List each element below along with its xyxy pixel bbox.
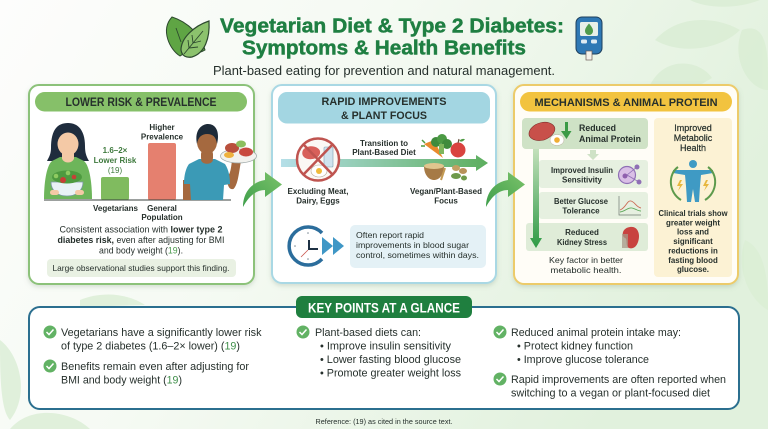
label: transition: Transition to bbox=[360, 139, 408, 148]
reference note: Reference: (19) as cited in the source text. bbox=[316, 419, 453, 426]
arrow: long down bbox=[530, 149, 542, 248]
column: lower risk points: of type 2 diabetes (1.6–2× lower) (19) bbox=[61, 340, 240, 352]
heading: rapid improvements: RAPID IMPROVEMENTS bbox=[322, 96, 446, 108]
column: animal protein points bbox=[494, 326, 726, 400]
chart labels: 1.6–2× bbox=[103, 146, 128, 155]
label: excluding meat: Dairy, Eggs bbox=[296, 196, 340, 206]
row: insulin sensitivity bbox=[539, 160, 648, 188]
icon: clock with arrow bbox=[289, 227, 344, 265]
callout: rapid improvements: Often report rapid bbox=[356, 230, 424, 240]
arrow: small down bbox=[587, 150, 599, 160]
chart baseline bbox=[44, 200, 231, 201]
illustration: woman with salad bbox=[44, 123, 92, 199]
box: improved metabolic health: fasting blood bbox=[668, 256, 718, 265]
column: plant based points: • Promote greater weight loss bbox=[320, 368, 461, 380]
label: vegan focus bbox=[410, 187, 482, 206]
heading: rapid improvements bbox=[278, 92, 490, 124]
box: improved metabolic health: greater weight bbox=[666, 218, 720, 228]
column: plant based points: • Improve insulin sensitivity bbox=[320, 340, 451, 352]
chart labels: Population bbox=[141, 213, 183, 222]
panel: rapid improvements bbox=[272, 85, 496, 283]
label: excluding meat bbox=[288, 187, 348, 206]
box: improved metabolic health: reductions in bbox=[668, 246, 718, 256]
text: consistent association: diabetes risk, even after adjusting for BMI bbox=[58, 235, 224, 246]
box: improved metabolic health bbox=[654, 118, 732, 277]
title bbox=[220, 14, 564, 60]
box: improved metabolic health: loss and bbox=[677, 228, 709, 236]
chart labels: Prevalence bbox=[141, 132, 184, 142]
column: animal protein points: switching to a vegan or plant-focused diet bbox=[511, 388, 711, 400]
chart labels bbox=[93, 123, 184, 222]
icon: check three bbox=[296, 326, 310, 338]
chart labels: Higher bbox=[149, 123, 175, 132]
column: animal protein points: • Protect kidney function bbox=[517, 340, 633, 352]
bar: general population bbox=[148, 143, 176, 200]
panel: lower risk and prevalence bbox=[29, 85, 256, 284]
row: kidney stress bbox=[526, 223, 648, 251]
heading: key points: KEY POINTS AT A GLANCE bbox=[308, 300, 460, 316]
panel: key points bbox=[29, 296, 739, 409]
column: plant based points: • Lower fasting blood glucose bbox=[320, 354, 461, 366]
column: animal protein points: • Improve glucose tolerance bbox=[517, 354, 649, 366]
heading: mechanisms bbox=[520, 92, 732, 112]
note: observational studies: Large observational studies support this finding. bbox=[52, 263, 230, 273]
column: lower risk points: BMI and body weight (19) bbox=[61, 374, 182, 386]
column: plant based points: Plant-based diets can: bbox=[315, 327, 421, 339]
row: glucose tolerance bbox=[539, 192, 648, 219]
heading: lower risk bbox=[35, 92, 247, 112]
row: insulin sensitivity: Improved Insulin bbox=[551, 166, 613, 175]
bar: vegetarians bbox=[101, 177, 129, 200]
chart labels: Lower Risk bbox=[94, 156, 137, 165]
icon: check four bbox=[494, 326, 506, 338]
icon: check five bbox=[494, 372, 506, 386]
box: improved metabolic health: Health bbox=[680, 143, 706, 153]
title: Vegetarian Diet & Type 2 Diabetes: bbox=[220, 14, 564, 38]
box: reduced animal protein: Animal Protein bbox=[579, 134, 641, 144]
arrow: panel one to two bbox=[243, 172, 282, 207]
box: reduced animal protein bbox=[522, 118, 648, 149]
text: key factor: Key factor in better bbox=[549, 255, 623, 265]
text: consistent association: and body weight (19). bbox=[99, 246, 183, 256]
chart labels: Vegetarians bbox=[93, 204, 139, 213]
column: lower risk points: Vegetarians have a significantly lower risk bbox=[61, 327, 262, 339]
chart labels: (19) bbox=[108, 166, 122, 175]
column: animal protein points: Reduced animal protein intake may: bbox=[511, 327, 681, 339]
icon: leaves bbox=[167, 17, 209, 57]
label: vegan focus: Vegan/Plant-Based bbox=[410, 187, 482, 196]
heading: rapid improvements: & PLANT FOCUS bbox=[341, 110, 427, 122]
box: improved metabolic health: significant bbox=[673, 237, 713, 246]
icon: glucose meter bbox=[576, 17, 602, 60]
callout: rapid improvements: control, sometimes within days. bbox=[356, 250, 479, 260]
panel: mechanisms and animal protein bbox=[514, 85, 738, 284]
heading: mechanisms: MECHANISMS & ANIMAL PROTEIN bbox=[534, 97, 718, 109]
box: improved metabolic health: glucose. bbox=[677, 265, 709, 274]
icon: check two bbox=[44, 360, 56, 372]
chart labels: General bbox=[147, 204, 177, 213]
subtitle: Plant-based eating for prevention and natural management. bbox=[213, 63, 555, 78]
box: reduced animal protein: Reduced bbox=[579, 123, 616, 133]
row: kidney stress: Kidney Stress bbox=[557, 238, 608, 247]
illustration: man with plate bbox=[183, 124, 256, 200]
icon: healthy body bbox=[671, 160, 715, 202]
arrow: panel two to three bbox=[486, 172, 525, 207]
arrow: transition bbox=[281, 155, 488, 171]
row: kidney stress: Reduced bbox=[565, 228, 599, 237]
icon: vegetables and fruit bbox=[421, 134, 467, 180]
note: observational studies bbox=[47, 259, 236, 277]
column: plant based points bbox=[296, 326, 461, 380]
label: vegan focus: Focus bbox=[434, 196, 458, 206]
column: animal protein points: Rapid improvements are often reported when bbox=[511, 374, 726, 386]
heading: lower risk: LOWER RISK & PREVALENCE bbox=[66, 97, 217, 109]
box: improved metabolic health: Clinical trials show bbox=[658, 209, 728, 218]
row: insulin sensitivity: Sensitivity bbox=[562, 176, 603, 184]
text: consistent association bbox=[58, 224, 224, 256]
text: key factor: metabolic health. bbox=[550, 265, 622, 275]
label: transition: Plant-Based Diet bbox=[352, 148, 416, 157]
icon: check bbox=[44, 326, 56, 338]
row: glucose tolerance: Better Glucose bbox=[554, 197, 609, 206]
column: lower risk points bbox=[44, 326, 262, 386]
text: consistent association: Consistent association with lower type 2 bbox=[60, 224, 222, 236]
row: glucose tolerance: Tolerance bbox=[562, 206, 600, 216]
heading: key points bbox=[296, 296, 472, 318]
label: transition bbox=[352, 139, 416, 157]
title: Symptoms & Health Benefits bbox=[242, 36, 526, 60]
text: key factor bbox=[549, 255, 623, 275]
box: improved metabolic health: Metabolic bbox=[674, 133, 713, 143]
label: excluding meat: Excluding Meat, bbox=[288, 187, 348, 196]
box: improved metabolic health: Improved bbox=[674, 123, 712, 133]
callout: rapid improvements bbox=[350, 225, 486, 268]
icon: no meat dairy eggs bbox=[296, 138, 340, 182]
column: lower risk points: Benefits remain even after adjusting for bbox=[61, 361, 249, 373]
callout: rapid improvements: improvements in blood sugar bbox=[356, 240, 469, 250]
